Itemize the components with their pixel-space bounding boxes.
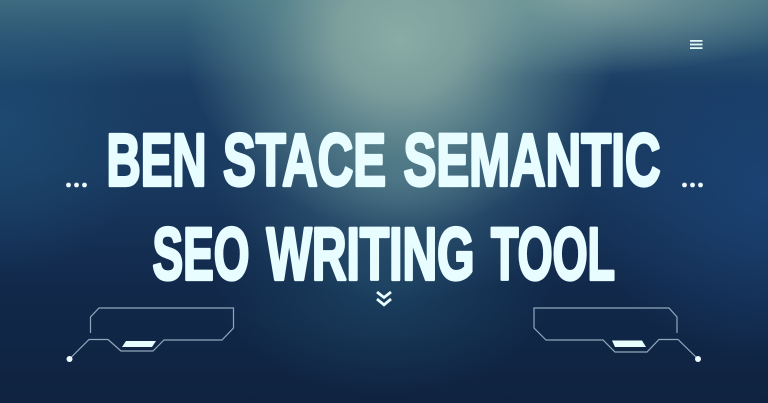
icon: right ellipsis	[682, 183, 703, 187]
title: WRITING	[266, 212, 474, 296]
left tech frame	[66, 308, 234, 362]
title	[106, 118, 660, 296]
icon: hamburger menu	[690, 40, 702, 49]
icon: double chevron down	[377, 292, 391, 305]
icon: left ellipsis	[66, 183, 87, 187]
title: TOOL	[491, 212, 615, 296]
right tech frame	[534, 308, 701, 362]
title: SEO	[152, 212, 250, 296]
title: STACE	[223, 118, 386, 202]
title: BEN	[106, 118, 206, 202]
